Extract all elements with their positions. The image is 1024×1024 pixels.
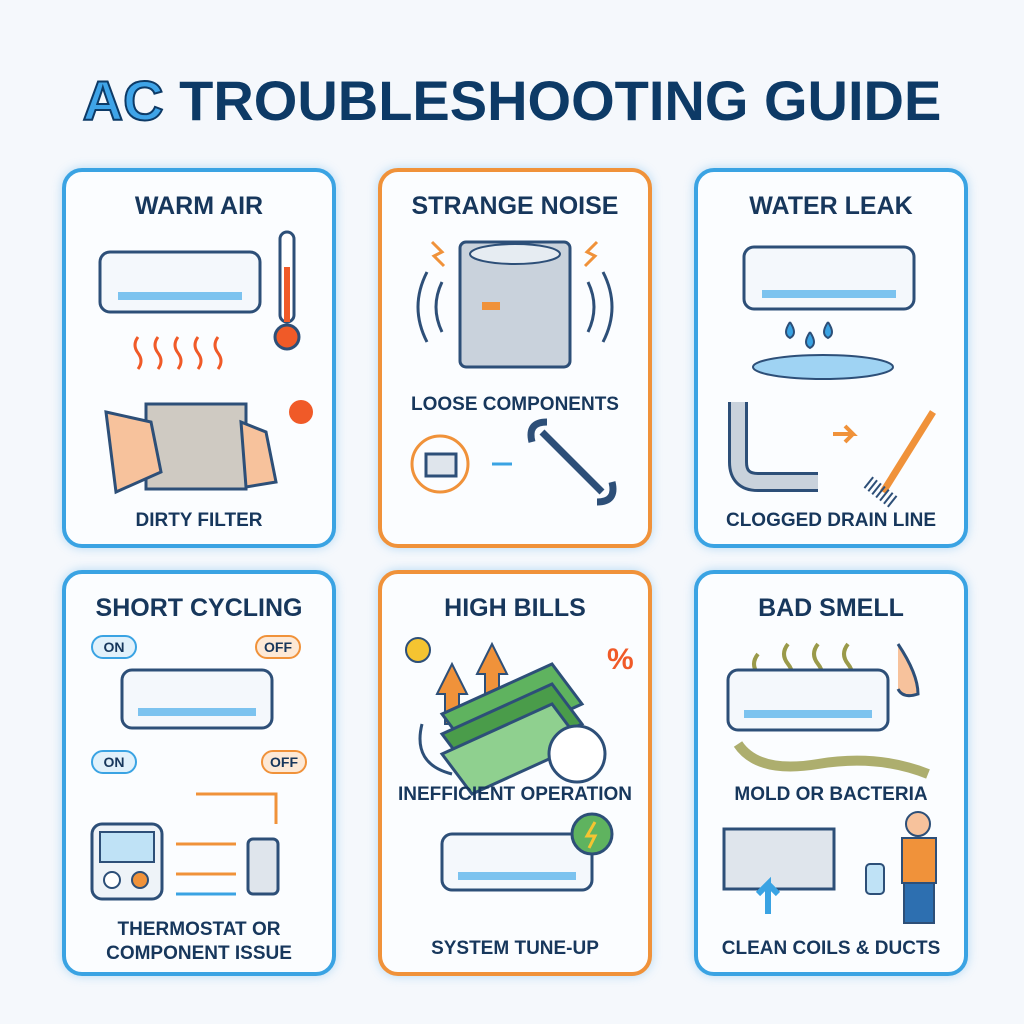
label: INEFFICIENT OPERATION [398, 784, 632, 805]
icon: on/off cycle, thermostat: OFF [270, 754, 298, 770]
panel: short cycling [62, 570, 336, 976]
panel: water leak [694, 168, 968, 548]
label: loose components: LOOSE COMPONENTS [411, 394, 619, 415]
heading: WATER LEAK [749, 192, 913, 220]
icon: on/off cycle, thermostat [90, 635, 307, 900]
icon: on/off cycle, thermostat: ON [104, 639, 124, 655]
icon: ac dripping, clogged pipe, brush [728, 246, 936, 508]
panel: strange noise [378, 168, 652, 548]
icon: ac with heat and thermometer, dirty filter [98, 230, 313, 494]
icon: money stack, arrows, gauge [405, 637, 634, 892]
label: THERMOSTAT OR [118, 919, 280, 940]
panel: high bills [378, 570, 652, 976]
icon: on/off cycle, thermostat: ON [104, 754, 124, 770]
label [106, 919, 292, 964]
label: MOLD OR BACTERIA [734, 784, 928, 805]
heading: BAD SMELL [758, 594, 904, 622]
heading: warm air: WARM AIR [135, 192, 263, 220]
label: dirty filter: DIRTY FILTER [135, 510, 263, 531]
icon: on/off cycle, thermostat: OFF [264, 639, 292, 655]
heading: HIGH BILLS [444, 594, 586, 622]
panel: bad smell [694, 570, 968, 976]
heading: STRANGE NOISE [412, 192, 618, 220]
label: SYSTEM TUNE-UP [431, 938, 599, 959]
panel: warm air [62, 168, 336, 548]
label: CLOGGED DRAIN LINE [726, 510, 936, 531]
icon: smelly ac, nose, technician [722, 642, 937, 924]
icon: money stack, arrows, gauge: % [607, 643, 634, 676]
title: AC TROUBLESHOOTING GUIDE [83, 69, 941, 132]
label: COMPONENT ISSUE [106, 943, 292, 964]
heading: SHORT CYCLING [96, 594, 302, 622]
label: CLEAN COILS & DUCTS [722, 938, 940, 959]
icon: outdoor condenser unit [410, 240, 616, 506]
